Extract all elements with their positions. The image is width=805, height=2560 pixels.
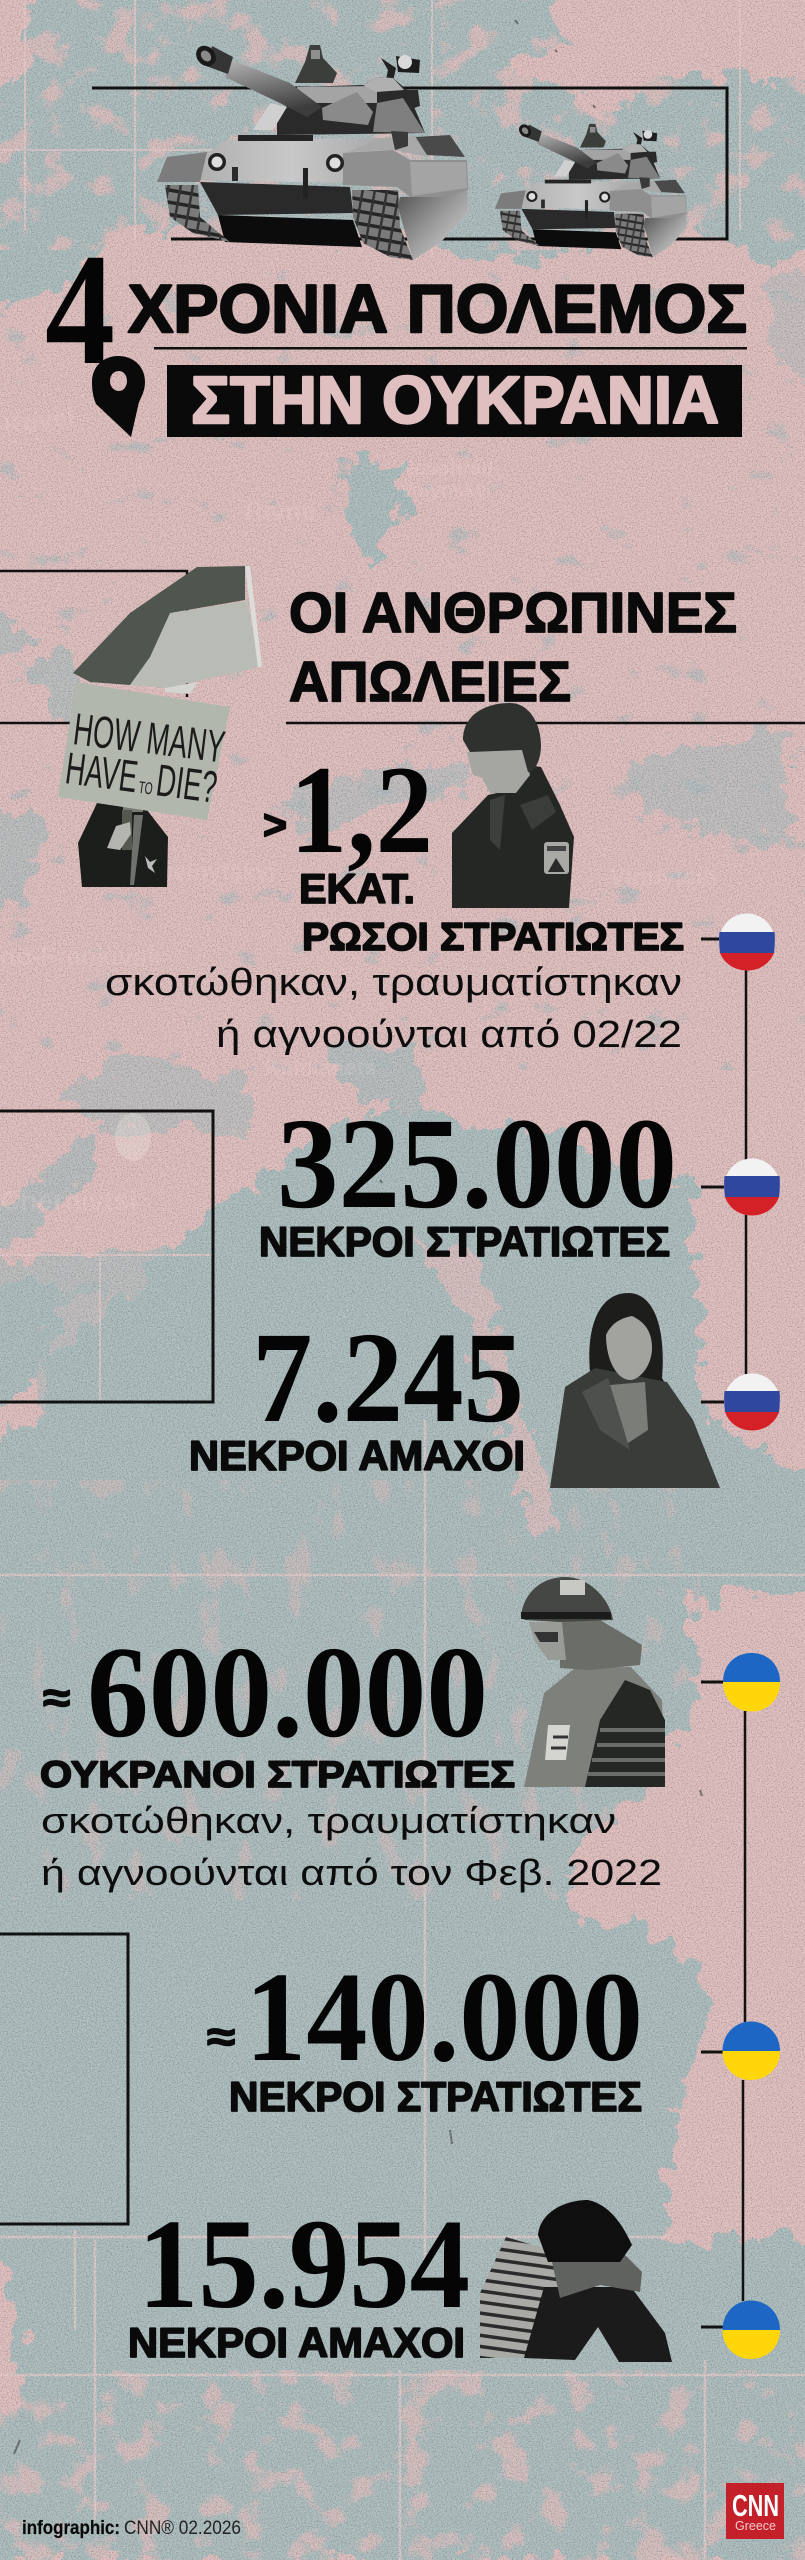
faint map place names	[0, 401, 717, 1216]
faint map place names: no-Frankivsk	[0, 941, 162, 971]
icon: Ukrainian flag 2	[722, 2022, 780, 2080]
faint map place names: Kovel	[2, 401, 76, 441]
timeline: Ukraine	[701, 1653, 780, 2359]
icon: Russian flag 1	[719, 914, 775, 970]
footer credit: infographic:	[22, 2518, 120, 2539]
image: protester with flag and sign	[58, 566, 262, 887]
icon: Ukrainian flag 3	[722, 2300, 780, 2359]
heading: human losses	[289, 581, 737, 714]
footer credit	[22, 2518, 241, 2539]
title number 4: 4	[45, 220, 115, 398]
stat: 140,000 dead soldiers: ≈	[207, 2013, 235, 2060]
stat: 600,000 Ukrainian soldiers: ή αγνοούνται από τον Φεβ. 2022	[41, 1852, 662, 1893]
icon: Russian flag 2	[724, 1158, 780, 1216]
stat: 1.2 million Russian soldiers: >	[263, 801, 287, 848]
image: Ukrainian soldier	[521, 1577, 665, 1787]
stat: 140,000 dead soldiers: 140.000	[245, 1946, 643, 2088]
icon: map pin	[92, 356, 145, 437]
stat: 15,954 dead civilians: 15.954	[138, 2193, 470, 2335]
title	[45, 220, 747, 438]
faint map place names: Kamianets	[265, 1055, 376, 1080]
stat: 7,245 dead civilians: 7.245	[252, 1306, 524, 1450]
heading: human losses: ΟΙ ΑΝΘΡΩΠΙΝΕΣ	[289, 581, 737, 645]
stat: 1.2 million Russian soldiers: ΕΚΑΤ.	[299, 865, 415, 912]
faint map place names: Khmelnytskyi	[120, 859, 276, 886]
image: Russian soldier	[452, 703, 574, 908]
image: small tank	[495, 122, 687, 257]
faint map place names: Vinnytsia	[610, 864, 717, 891]
faint map place names: Novohrad-	[400, 458, 500, 480]
stat: 600,000 Ukrainian soldiers: 600.000	[87, 1620, 488, 1765]
stat: 1.2 million Russian soldiers: σκοτώθηκαν, τραυματίστηκαν	[105, 962, 682, 1004]
logo: CNN Greece	[726, 2483, 784, 2539]
icon: Russian flag 3	[724, 1374, 780, 1430]
flag	[73, 566, 262, 694]
image: child hugging knees	[480, 2200, 672, 2362]
frame: section heading	[0, 571, 805, 723]
image: large tank	[157, 42, 468, 260]
stat: 325,000 dead soldiers: 325.000	[277, 1092, 677, 1236]
stat: 7,245 dead civilians: ΝΕΚΡΟΙ ΑΜΑΧΟΙ	[189, 1432, 525, 1479]
frame: left box 2	[0, 1934, 128, 2224]
stat: 600,000 Ukrainian soldiers: ΟΥΚΡΑΝΟΙ ΣΤΡΑΤΙΩΤΕΣ	[40, 1754, 515, 1795]
stat: 1.2 million Russian soldiers	[105, 741, 684, 1056]
title line 1: ΧΡΟΝΙΑ ΠΟΛΕΜΟΣ	[128, 271, 747, 347]
stat: 600,000 Ukrainian soldiers: ≈	[43, 1674, 70, 1721]
faint map place names: Volynskyi	[400, 480, 492, 502]
logo: CNN Greece: Greece	[735, 2518, 776, 2533]
heading: human losses: ΑΠΩΛΕΙΕΣ	[289, 650, 571, 714]
stat: 325,000 dead soldiers: ΝΕΚΡΟΙ ΣΤΡΑΤΙΩΤΕΣ	[259, 1218, 670, 1265]
stat: 1.2 million Russian soldiers: ΡΩΣΟΙ ΣΤΡΑΤΙΩΤΕΣ	[302, 916, 684, 959]
faint map place names: Rivne	[245, 496, 316, 526]
stat: 15,954 dead civilians: ΝΕΚΡΟΙ ΑΜΑΧΟΙ	[128, 2319, 465, 2366]
person	[78, 803, 168, 887]
sign	[58, 682, 230, 820]
stat: 1.2 million Russian soldiers: 1,2	[290, 741, 433, 880]
stat: 600,000 Ukrainian soldiers	[40, 1620, 662, 1893]
image: protester with flag and sign: HOW MANY	[71, 703, 228, 772]
image: protester with flag and sign: HAVE TO DIE?	[63, 742, 220, 813]
timeline: Russia	[701, 914, 780, 1430]
title line 2 box: ΣΤΗΝ ΟΥΚΡΑΝΙΑ	[191, 363, 719, 438]
image: girl in coat	[550, 1293, 720, 1488]
frame: top tanks	[92, 88, 727, 239]
faint map place names: Chernivtsi	[0, 1185, 137, 1216]
frame: left box 1	[0, 1111, 213, 1402]
footer credit: CNN® 02.2026	[124, 2518, 241, 2539]
stat: 7,245 dead civilians	[189, 1306, 525, 1479]
logo: CNN Greece: CNN	[732, 2488, 779, 2523]
stat: 600,000 Ukrainian soldiers: σκοτώθηκαν, τραυματίστηκαν	[41, 1800, 616, 1841]
stat: 1.2 million Russian soldiers: ή αγνοούνται από 02/22	[216, 1014, 682, 1056]
icon: Ukrainian flag 1	[723, 1653, 780, 1712]
stat: 140,000 dead soldiers: ΝΕΚΡΟΙ ΣΤΡΑΤΙΩΤΕΣ	[229, 2073, 642, 2120]
